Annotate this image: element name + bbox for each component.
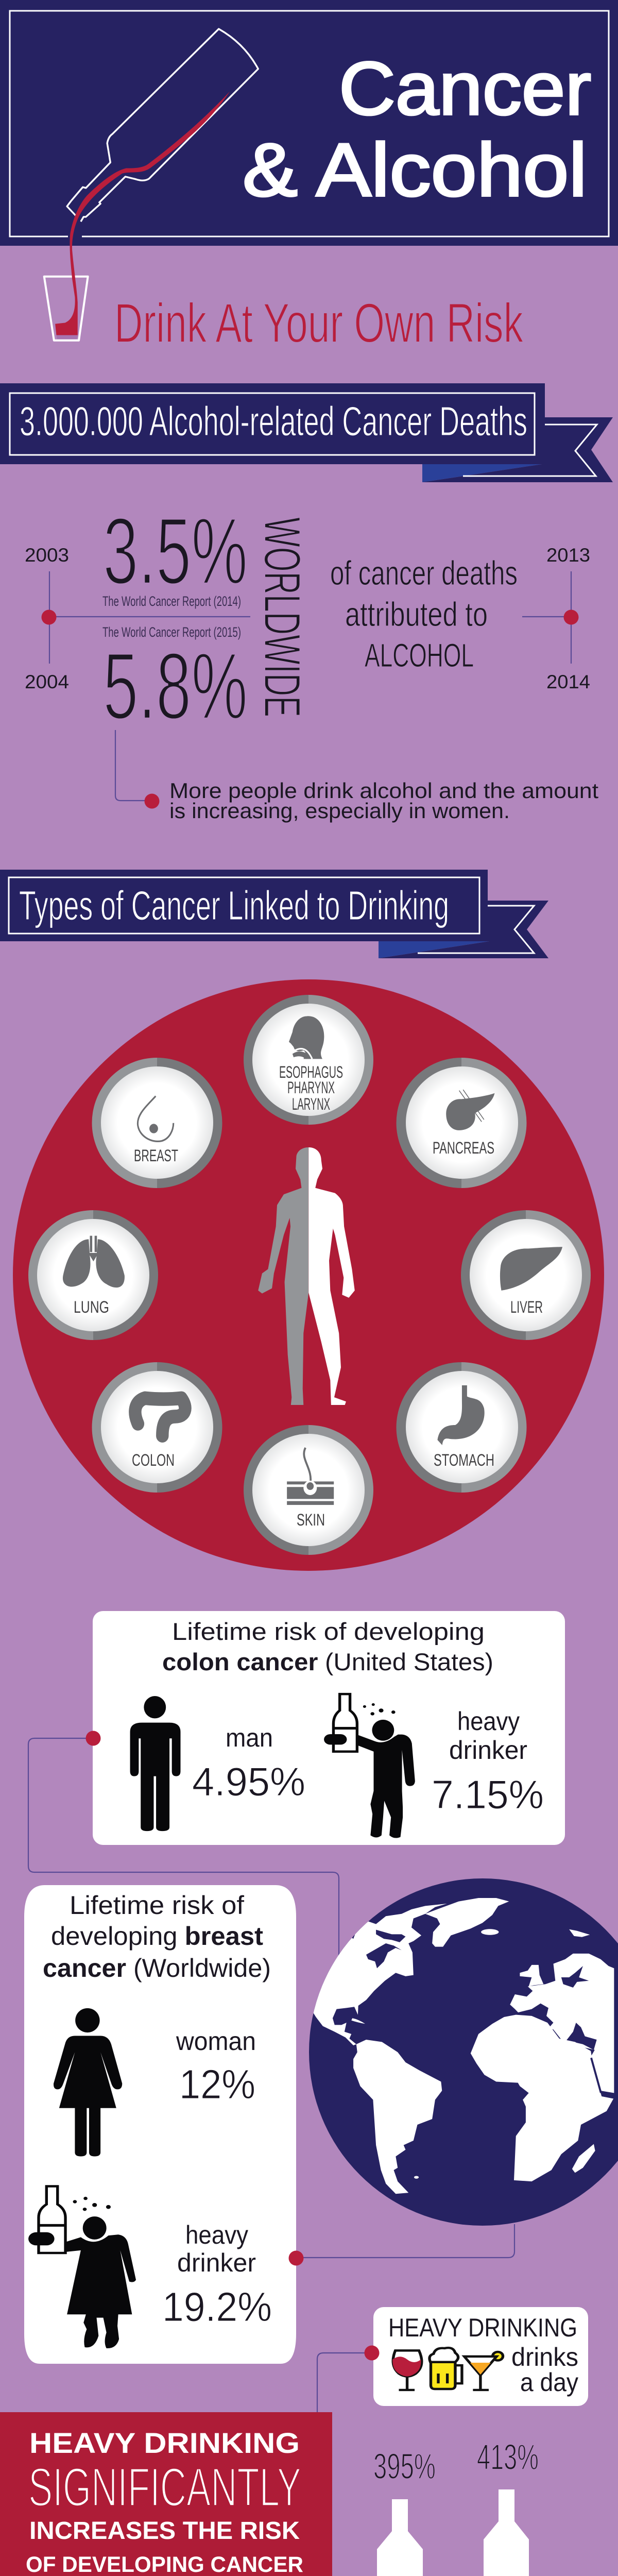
badge: pancreas: PANCREAS (433, 1139, 494, 1157)
bar: oral and pharyngeal bottle 413% (471, 2437, 544, 2576)
badge: esophagus pharynx larynx: PHARYNX (287, 1078, 335, 1097)
panel: colon cancer risk: 7.15% (432, 1772, 544, 1817)
panel: breast cancer risk: developing breast (51, 1922, 263, 1951)
vertical label worldwide: WORLDWIDE (254, 517, 311, 717)
callout: more people drink: is increasing, especially in women. (169, 799, 510, 823)
badge: colon (92, 1362, 222, 1493)
banner: types of cancer heading (0, 870, 548, 958)
icon: man (130, 1696, 181, 1831)
panel: colon cancer risk: man (226, 1723, 273, 1752)
timeline left (25, 545, 250, 692)
statistic 5.8% (102, 624, 248, 739)
panel: heavy drinking significantly increases risk: SIGNIFICANTLY (28, 2457, 301, 2518)
statistic 5.8%: The World Cancer Report (2015) (102, 624, 241, 640)
badge: stomach: STOMACH (434, 1451, 494, 1469)
banner: deaths heading (0, 383, 613, 482)
text: of cancer deaths: ALCOHOL (365, 637, 474, 674)
badge: stomach (397, 1362, 526, 1493)
panel: heavy drinking significantly increases risk (0, 2412, 332, 2576)
text: of cancer deaths: of cancer deaths (330, 554, 518, 592)
bar: oral and pharyngeal bottle 413%: 413% (477, 2437, 539, 2477)
panel: heavy drinking definition (365, 2307, 588, 2406)
icon: martini glass (465, 2352, 503, 2390)
icon: beer mug (430, 2348, 462, 2389)
panel: heavy drinking definition: HEAVY DRINKING (388, 2313, 577, 2342)
panel: breast cancer risk (24, 1885, 304, 2364)
icon: woman (54, 2008, 122, 2157)
panel: colon cancer risk: colon cancer (United States) (162, 1648, 493, 1675)
panel: colon cancer risk: drinker (449, 1736, 527, 1765)
icon: human body (258, 1147, 355, 1405)
panel: breast cancer risk: cancer (Worldwide) (43, 1954, 271, 1982)
callout: more people drink (115, 730, 598, 823)
statistic 3.5%: The World Cancer Report (2014) (102, 594, 241, 609)
title: Cancer (339, 46, 591, 130)
timeline left: 2004 (25, 671, 69, 692)
statistic 5.8%: 5.8% (103, 633, 248, 739)
timeline right: 2014 (546, 671, 590, 692)
timeline left: 2003 (25, 545, 69, 566)
panel: heavy drinking definition: drinks (511, 2343, 578, 2371)
bar: esophagus bottle 395% (354, 2446, 448, 2576)
panel: colon cancer risk (85, 1611, 565, 1845)
panel: breast cancer risk: drinker (177, 2248, 256, 2277)
badge: breast (92, 1058, 222, 1188)
title: & Alcohol (243, 128, 587, 212)
badge: lung: LUNG (74, 1298, 109, 1316)
bar: esophagus bottle 395%: 395% (373, 2446, 436, 2486)
icon: wine glass (392, 2350, 422, 2390)
panel: red circle with organs (13, 979, 604, 1571)
panel: colon cancer risk: 4.95% (192, 1759, 305, 1804)
badge: breast: BREAST (134, 1146, 178, 1165)
timeline right: 2013 (546, 545, 590, 566)
icon: heavy drinking man (324, 1694, 415, 1838)
icon: wine bottle pouring into glass (44, 29, 258, 341)
panel: colon cancer risk: Lifetime risk of developing (172, 1618, 485, 1645)
badge: esophagus pharynx larynx: LARYNX (292, 1095, 330, 1113)
timeline right (522, 545, 590, 692)
panel: breast cancer risk: 12% (179, 2061, 255, 2107)
badge: skin: SKIN (297, 1511, 325, 1529)
badge: liver (461, 1210, 591, 1340)
panel: heavy drinking significantly increases risk: HEAVY DRINKING (29, 2427, 300, 2459)
text: of cancer deaths: attributed to (345, 595, 488, 633)
panel: breast cancer risk: 19.2% (162, 2284, 272, 2330)
badge: colon: COLON (132, 1451, 175, 1469)
statistic 3.5% (102, 498, 248, 609)
icon: heavy drinking woman (28, 2187, 136, 2348)
panel: heavy drinking significantly increases risk: INCREASES THE RISK (29, 2517, 300, 2545)
panel: heavy drinking definition: a day (520, 2368, 578, 2397)
panel: breast cancer risk: heavy (185, 2221, 248, 2249)
connector: breast panel to globe (296, 2224, 514, 2258)
callout: more people drink: More people drink alcohol and the amount (169, 778, 598, 803)
title (243, 46, 591, 212)
panel: breast cancer risk: Lifetime risk of (70, 1891, 244, 1920)
badge: lung (28, 1210, 158, 1340)
connector: colon panel to globe (28, 1738, 339, 1973)
connector: heavy drinking box to red panel (317, 2353, 372, 2412)
badge: esophagus pharynx larynx (244, 995, 373, 1125)
badge: skin (244, 1425, 373, 1555)
panel: breast cancer risk: woman (176, 2027, 256, 2056)
header panel (0, 0, 618, 246)
statistic 3.5%: 3.5% (103, 498, 248, 604)
badge: pancreas (397, 1058, 526, 1188)
badge: esophagus pharynx larynx: ESOPHAGUS (279, 1063, 343, 1081)
badge: liver: LIVER (510, 1298, 543, 1316)
globe (309, 1878, 618, 2226)
panel: colon cancer risk: heavy (457, 1707, 520, 1736)
text: of cancer deaths (330, 554, 518, 674)
